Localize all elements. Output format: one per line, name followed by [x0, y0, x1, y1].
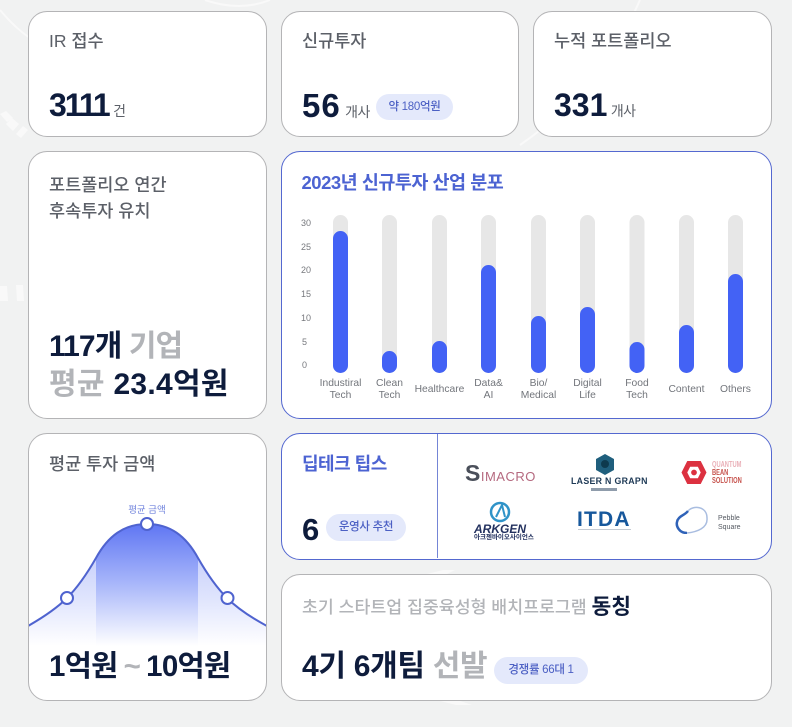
panel: IR 접수 — [28, 11, 267, 137]
panel: 포트폴리오 연간 후속투자 유치 — [28, 151, 267, 419]
y axis: 10 — [301, 313, 311, 323]
category labels: Life — [579, 390, 596, 401]
label: 초기 스타트업 집중육성형 배치프로그램 동칭: 초기 스타트업 집중육성형 배치프로그램 동칭 — [302, 595, 631, 619]
category labels: Data& — [474, 378, 503, 389]
panel: 동칭 배치프로그램 — [281, 574, 772, 701]
pill: 운영사 추천 — [326, 514, 406, 541]
category labels: Tech — [626, 390, 648, 401]
y axis: 25 — [301, 242, 311, 252]
logo: Quantum Bean Solution — [682, 460, 742, 485]
category labels: Medical — [521, 390, 556, 401]
category labels: Content — [668, 384, 705, 395]
label: 누적 포트폴리오: 누적 포트폴리오 — [554, 31, 672, 51]
panel: 누적 포트폴리오 — [533, 11, 772, 137]
y axis: 0 — [302, 360, 307, 370]
value: 117개 기업 평균 23.4억원 — [49, 330, 229, 401]
bell curve chart — [29, 504, 266, 640]
category labels — [320, 378, 751, 401]
pill: 운영사 추천: 운영사 추천 — [339, 521, 393, 533]
bar chart: 산업 분포 — [301, 215, 751, 401]
heading: 2023년 신규투자 산업 분포: 2023년 신규투자 산업 분포 — [302, 172, 503, 193]
category labels: Industiral — [320, 378, 361, 389]
category labels: Tech — [379, 390, 401, 401]
curve line — [28, 524, 266, 626]
logo: Laser n Graphene — [571, 454, 648, 491]
y axis — [301, 218, 311, 370]
side fill — [28, 558, 266, 646]
value: 56 개사: 56 개사 — [302, 87, 370, 124]
value: 6: 6 — [302, 512, 319, 547]
logo: Pebble Square — [676, 506, 741, 534]
label: 포트폴리오 연간 후속투자 유치: 포트폴리오 연간 — [49, 175, 167, 195]
curve markers — [60, 518, 233, 604]
divider — [437, 434, 438, 558]
label: IR 접수: IR 접수 — [49, 31, 104, 51]
value: 117개 기업 평균 23.4억원: 평균 23.4억원 — [49, 368, 229, 401]
pill: 경쟁률 66대 1 — [494, 657, 588, 684]
category labels: Healthcare — [415, 384, 465, 395]
logo: SIMACRO: SIMACRO — [465, 460, 536, 486]
category labels: Tech — [330, 390, 352, 401]
category labels: Others — [720, 384, 751, 395]
logo: Quantum Bean Solution: BEAN — [712, 468, 728, 477]
logo: ARKGEN: 아크젠바이오사이언스 — [474, 534, 534, 541]
label: 평균 투자 금액: 평균 투자 금액 — [49, 454, 155, 474]
logo: Quantum Bean Solution: SOLUTION — [712, 476, 742, 485]
y axis: 30 — [301, 218, 311, 228]
logo: ARKGEN: ARKGEN — [474, 522, 526, 536]
heading: 딥테크 팁스: 딥테크 팁스 — [302, 454, 387, 474]
value: 1억원 ~ 10억원: 1억원 ~ 10억원 — [49, 650, 230, 683]
logo: Quantum Bean Solution: QUANTUM — [712, 460, 741, 469]
panel: 딥테크 팁스 — [281, 433, 772, 560]
pill: 약 180억원: 약 180억원 — [388, 101, 441, 113]
pill: 경쟁률 66대 1: 경쟁률 66대 1 — [508, 664, 574, 676]
logo: Pebble Square: Pebble — [718, 515, 740, 522]
y axis: 15 — [301, 289, 311, 299]
value: 4기 6개팀 선발: 4기 6개팀 선발 — [302, 650, 487, 683]
panel: 2023년 신규투자 산업 분포 — [281, 151, 772, 419]
category labels: Bio/ — [530, 378, 548, 389]
y axis: 5 — [302, 337, 307, 347]
category labels: AI — [484, 390, 493, 401]
panel: 신규투자 — [281, 11, 519, 137]
logo: ARKGEN — [474, 502, 534, 541]
pill: 약 180억원 — [376, 94, 453, 120]
center fill — [96, 524, 198, 646]
logo: Pebble Square: Square — [718, 524, 741, 531]
panel: 평균 투자 금액 — [28, 433, 267, 701]
marker label: 평균 금액 — [128, 504, 165, 516]
value: 331 개사: 331 개사 — [554, 87, 635, 123]
logo: Laser n Graphene: LASER N GRAPN — [571, 476, 648, 486]
bar tracks — [333, 215, 743, 373]
label: 포트폴리오 연간 후속투자 유치 — [49, 175, 167, 221]
label: 포트폴리오 연간 후속투자 유치: 후속투자 유치 — [49, 201, 150, 221]
y axis: 20 — [301, 265, 311, 275]
label: 신규투자: 신규투자 — [302, 31, 366, 51]
logo: ITDA: ITDA — [577, 508, 631, 531]
category labels: Clean — [376, 378, 403, 389]
value: 117개 기업 평균 23.4억원: 117개 기업 — [49, 330, 182, 363]
category labels: Food — [625, 378, 649, 389]
bar values — [333, 231, 743, 373]
category labels: Digital — [573, 378, 602, 389]
value: 3111 건: 3111 건 — [49, 87, 125, 123]
